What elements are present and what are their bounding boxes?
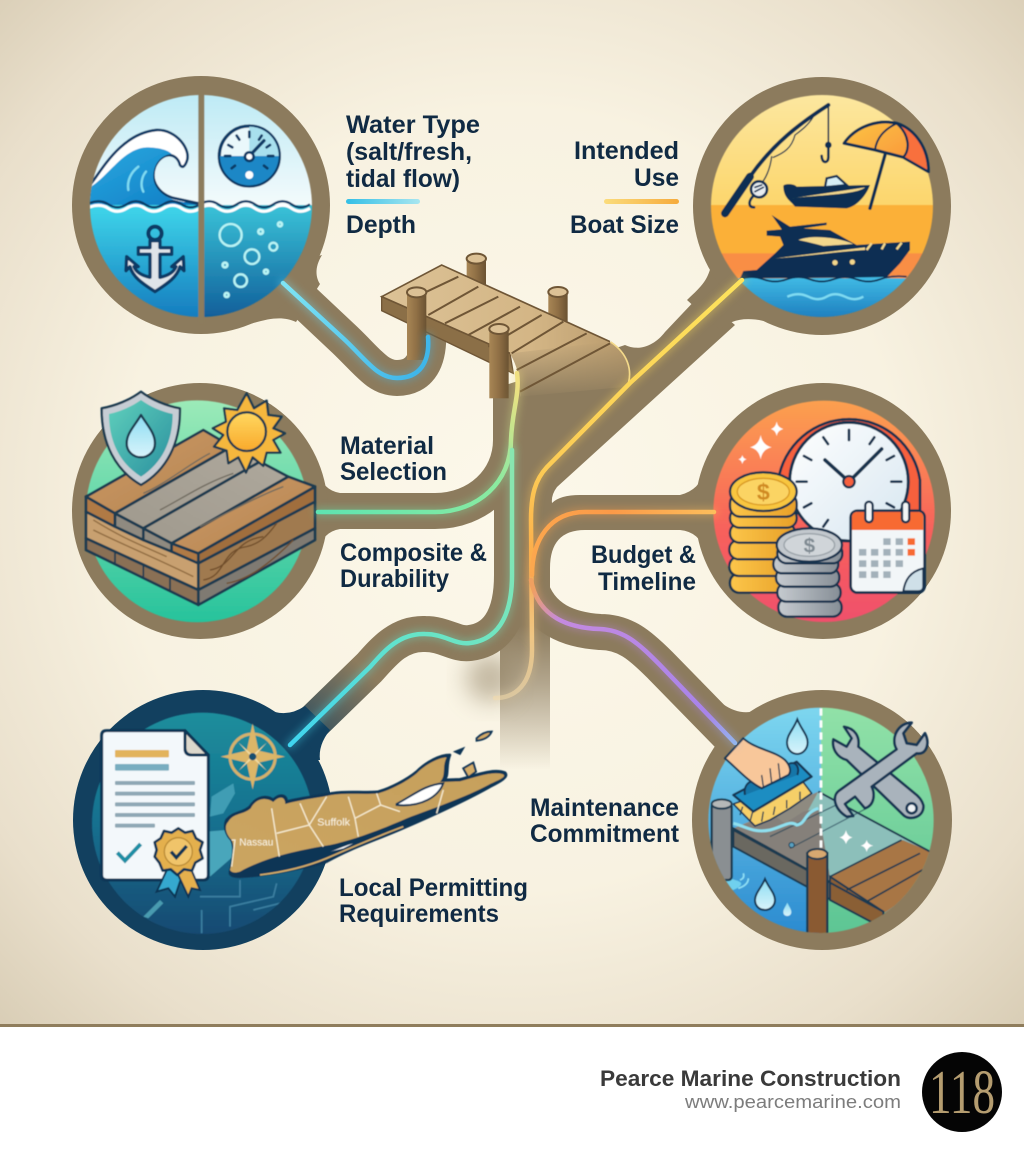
icon: silver coin stack: [773, 528, 842, 617]
footer website: www.pearcemarine.com: [684, 1092, 901, 1112]
icon: bubbles: [220, 222, 282, 297]
icon: layered decking boards: [86, 430, 315, 605]
deck surface and ramp: [382, 265, 629, 398]
panel: water type and depth circle: [72, 76, 330, 334]
icon: sun: [213, 393, 285, 473]
county labels: [239, 818, 350, 849]
label: water type: Water Type: [346, 111, 480, 139]
purple line: [531, 580, 735, 743]
label: composite and durability: [340, 539, 487, 593]
icon: motor yacht: [740, 215, 910, 281]
label: water type: tidal flow): [346, 165, 460, 193]
panel: local permitting circle: [73, 690, 506, 950]
panel: material selection circle: [72, 383, 328, 639]
ramp rim: [611, 342, 630, 387]
dashed divider: [818, 708, 824, 848]
label: maintenance commitment: Maintenance: [530, 794, 679, 822]
label: boat size: Boat Size: [570, 211, 679, 239]
county labels: Nassau: [239, 838, 273, 849]
county labels: Suffolk: [317, 818, 350, 829]
icon: clock: [778, 419, 920, 541]
label: intended use: Intended: [574, 137, 679, 165]
label: intended use: [574, 137, 679, 192]
footer company name: Pearce Marine Construction: [600, 1066, 901, 1091]
accent bar: gold: [604, 199, 679, 204]
label: budget and timeline: Timeline: [598, 568, 696, 596]
footer: [0, 1024, 1024, 1154]
deck plank lines: [427, 277, 610, 392]
label: local permitting requirements: Requirements: [339, 900, 499, 928]
icon: wood and grey dock piles: [711, 799, 827, 940]
logo badge: [922, 1052, 1002, 1132]
icon: silver coin stack: $: [804, 535, 816, 558]
icon: fishing rod: [725, 105, 831, 213]
icon: anchor: [126, 227, 184, 292]
icon: small motorboat: [783, 176, 870, 208]
label: material selection: Material: [340, 432, 434, 460]
label: composite and durability: Durability: [340, 565, 449, 593]
label: material selection: Selection: [340, 458, 447, 486]
icon: hand with scrub brush: [725, 738, 812, 826]
deck side: [382, 297, 513, 373]
map background shapes: [143, 783, 293, 933]
teal line: [290, 450, 512, 745]
label: budget and timeline: [591, 541, 696, 596]
yellow line: [495, 280, 742, 698]
label: water type: (salt/fresh,: [346, 138, 472, 166]
icon: sparkles: [738, 422, 783, 464]
county boundary lines: [232, 790, 443, 867]
brown connector network: [250, 255, 780, 770]
dock illustration: [382, 254, 630, 398]
label: water type: [346, 111, 480, 193]
blue line: [283, 283, 428, 378]
icon: dock deck split view: [733, 792, 930, 928]
back piles: [467, 254, 568, 325]
coloured path lines: [283, 280, 742, 745]
water surface ripples: [87, 205, 310, 211]
icon: gold coin stack: [729, 472, 797, 593]
label: depth: Depth: [346, 211, 416, 239]
icon: crossed wrenches: [833, 723, 927, 818]
icon: depth gauge: [219, 126, 279, 186]
panel: budget and timeline circle: [695, 383, 951, 639]
icon: Long Island map: [225, 732, 506, 877]
icon: breaking wave: [90, 130, 198, 205]
orange line: [532, 512, 714, 575]
green line: [318, 373, 518, 512]
label: maintenance commitment: [530, 794, 680, 848]
front piles: [407, 287, 509, 398]
panel: intended use and boat size circle: [693, 77, 951, 335]
label: composite and durability: Composite &: [340, 539, 487, 567]
label: budget and timeline: Budget &: [591, 541, 696, 569]
icon: beach umbrella: [844, 122, 928, 208]
panel: maintenance circle: [692, 690, 952, 950]
accent bar: blue: [346, 199, 420, 204]
label: intended use: Use: [634, 164, 679, 192]
label: local permitting requirements: [339, 874, 528, 928]
icon: gold seal with ribbons: [155, 828, 203, 897]
label: material selection: [340, 432, 447, 486]
icon: compass rose: [221, 723, 285, 789]
icon: water shield: [102, 392, 180, 485]
logo badge: 118: [929, 1059, 995, 1127]
icon: calendar: [851, 502, 925, 593]
icon: gold coin stack: $: [757, 479, 770, 505]
label: maintenance commitment: Commitment: [530, 820, 680, 848]
icon: water drops: [755, 719, 808, 916]
icon: permit document: [102, 731, 208, 880]
label: local permitting requirements: Local Permitting: [339, 874, 528, 902]
